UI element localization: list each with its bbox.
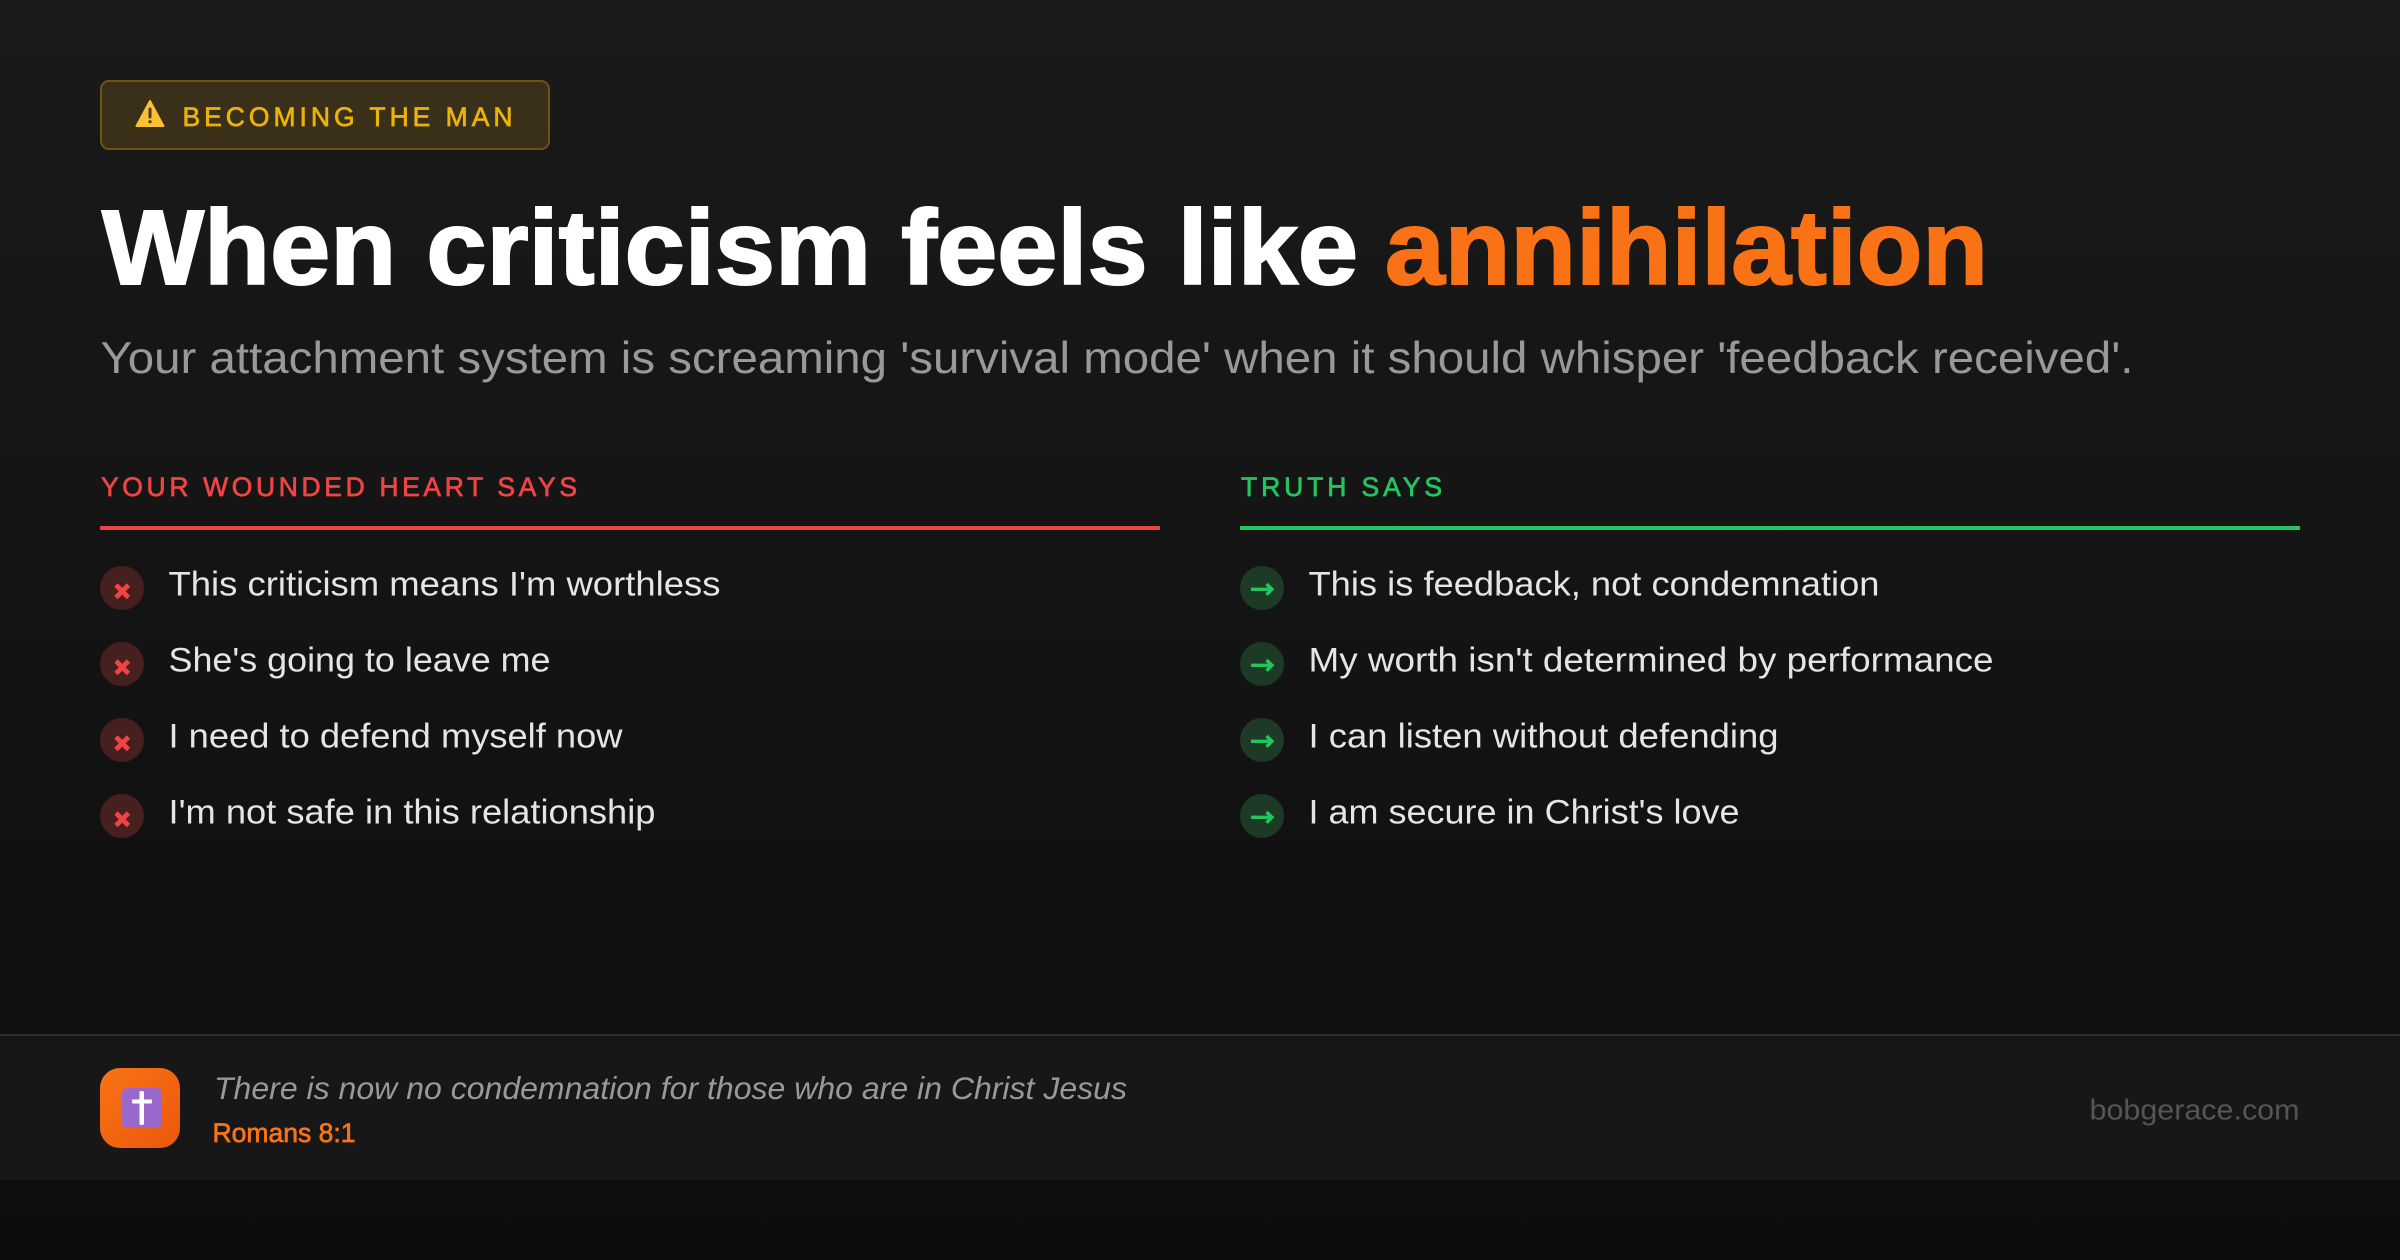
scripture quote: There is now no condemnation for those who are in Christ Jesus (214, 1070, 1127, 1106)
panel: wounded heart (100, 472, 1160, 838)
item: worthless: This criticism means I'm worthless (168, 566, 720, 604)
badge: becoming the man (101, 81, 549, 149)
item: feedback: This is feedback, not condemnation (1308, 566, 1880, 604)
title: When criticism feels like (102, 189, 1358, 307)
item: secure: I am secure in Christ's love (1308, 794, 1740, 832)
item: leave me (100, 642, 550, 686)
icon: warning triangle (136, 101, 164, 126)
title highlight: annihilation (1385, 189, 1988, 307)
footer bar (0, 1034, 2400, 1180)
item: not safe: I'm not safe in this relationship (168, 794, 656, 832)
subtitle: Your attachment system is screaming 'survival mode' when it should whisper 'feedback received'. (100, 334, 2134, 383)
scripture reference: Romans 8:1 (212, 1118, 356, 1148)
badge label: BECOMING THE MAN (182, 102, 512, 132)
item: defend myself: I need to defend myself now (168, 718, 623, 756)
item: listen: I can listen without defending (1308, 718, 1778, 756)
icon: cross (100, 1068, 180, 1148)
website: bobgerace.com (2090, 1094, 2300, 1126)
item: leave me: She's going to leave me (168, 642, 550, 680)
title (102, 189, 1988, 307)
panel: truth (1240, 472, 2300, 838)
item: worth: My worth isn't determined by performance (1308, 642, 1994, 680)
heading: wounded heart: YOUR WOUNDED HEART SAYS (101, 472, 577, 502)
heading: truth: TRUTH SAYS (1241, 472, 1442, 502)
